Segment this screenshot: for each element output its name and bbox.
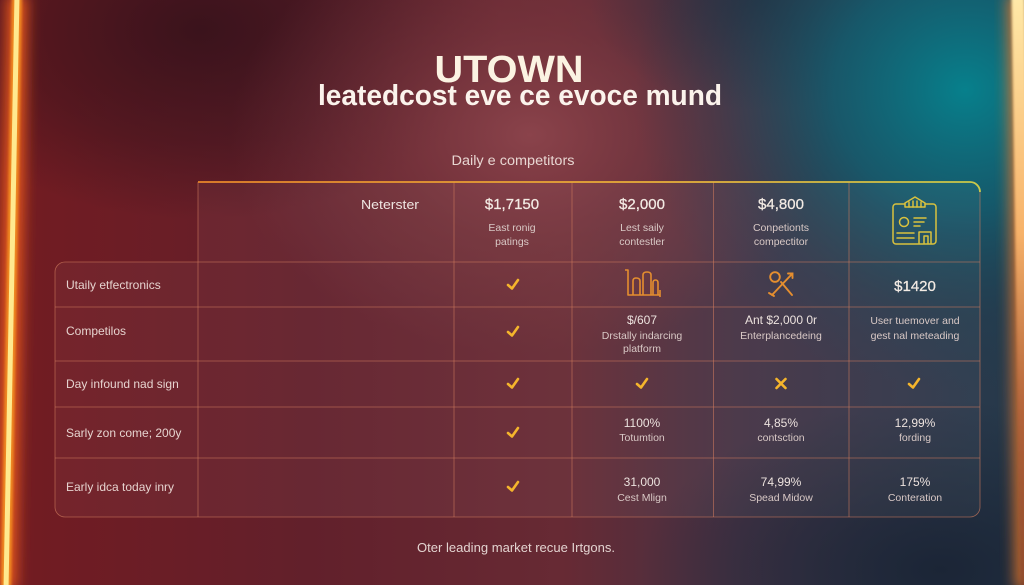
row 2: Competilos: gest nal meteading [871, 330, 960, 342]
row 4: Sarly zon come; 200y: 1100% [624, 416, 661, 430]
row 4: Sarly zon come; 200y [66, 416, 936, 444]
header row: East ronig [488, 222, 536, 234]
icon: crossed arrows [769, 272, 792, 296]
row 2: Competilos: $/607 [627, 313, 657, 327]
row 5: Early idca today inry: Conteration [888, 492, 942, 504]
row 2: Competilos: platform [623, 343, 661, 355]
row 5: Early idca today inry [66, 475, 942, 504]
icon: clipboard with building [893, 197, 936, 244]
comparison table [55, 182, 980, 517]
row 4: Sarly zon come; 200y: Sarly zon come; 200y [66, 426, 181, 440]
table caption: Daily e competitors [452, 153, 575, 168]
icon: bar chart [625, 270, 660, 297]
check [637, 379, 647, 388]
table panel [55, 182, 980, 517]
row 5: Early idca today inry: 74,99% [761, 475, 802, 489]
row 5: Early idca today inry: Cest Mlign [617, 492, 667, 504]
row 4: Sarly zon come; 200y: contsction [757, 432, 805, 444]
row 2: Competilos: Ant $2,000 0r [745, 313, 817, 327]
header row [361, 196, 936, 248]
check [909, 379, 919, 388]
row 4: Sarly zon come; 200y: Totumtion [619, 432, 665, 444]
left neon line [6, 0, 17, 585]
title: UTOWN [434, 49, 584, 91]
header row: patings [495, 236, 529, 248]
header row: $4,800 [758, 196, 804, 213]
check [508, 280, 518, 288]
header row: contestler [619, 236, 665, 248]
cross [776, 379, 786, 388]
header row: Neterster [361, 198, 419, 212]
row 5: Early idca today inry: 31,000 [624, 475, 661, 489]
header row: compectitor [754, 236, 809, 248]
row 2: Competilos: User tuemover and [870, 315, 960, 327]
row 5: Early idca today inry: 175% [900, 475, 931, 489]
row 2: Competilos: Enterplancedeing [740, 330, 822, 342]
row 4: Sarly zon come; 200y: 12,99% [895, 416, 936, 430]
header row: Conpetionts [753, 222, 809, 234]
check [508, 327, 518, 336]
row 2: Competilos: Competilos [66, 324, 126, 338]
footer note: Oter leading market recue Irtgons. [417, 541, 615, 555]
check [508, 379, 518, 388]
row 5: Early idca today inry: Spead Midow [749, 492, 813, 504]
table grid [55, 182, 980, 517]
table top accent [198, 182, 980, 192]
row 2: Competilos [66, 313, 960, 355]
row 4: Sarly zon come; 200y: 4,85% [764, 416, 798, 430]
row 1: Utaily etfectronics: Utaily etfectronics [66, 278, 161, 292]
header row: $1,7150 [485, 196, 539, 213]
header row: $2,000 [619, 196, 665, 213]
check [508, 428, 518, 436]
row 5: Early idca today inry: Early idca today inry [66, 480, 174, 494]
subtitle: leatedcost eve ce evoce mund [318, 80, 722, 112]
row 1: Utaily etfectronics: $1420 [894, 278, 936, 295]
row 2: Competilos: Drstally indarcing [602, 330, 682, 342]
row 3: Day infound nad sign: Day infound nad sign [66, 377, 179, 391]
row 3: Day infound nad sign [66, 377, 919, 391]
header row: Lest saily [620, 222, 665, 234]
check [508, 482, 518, 490]
title [318, 49, 722, 112]
row 4: Sarly zon come; 200y: fording [899, 432, 931, 444]
row 1: Utaily etfectronics [66, 270, 936, 297]
right neon line [1018, 0, 1024, 585]
